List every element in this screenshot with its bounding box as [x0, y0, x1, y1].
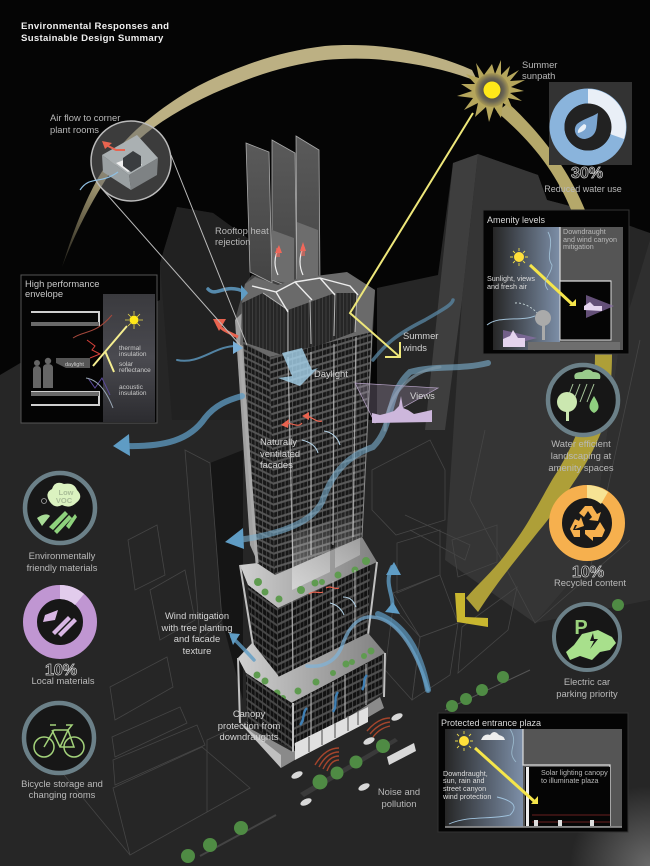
- local materials indicator: Local materials: [31, 675, 95, 686]
- red exhaust arrow: [217, 324, 238, 337]
- trees: [181, 599, 624, 863]
- panel: protected entrance plaza: Protected entrance plaza: [441, 718, 541, 728]
- icon: environmentally friendly materials: Low: [58, 488, 74, 497]
- label: environmentally friendly materials: Environmentally: [29, 550, 96, 561]
- tower top section facade: [240, 332, 372, 575]
- label: summer sunpath: Summer: [522, 59, 557, 70]
- label: naturally ventilated facades: Naturally: [260, 436, 297, 447]
- panel: high performance envelope: insulation: [119, 390, 147, 397]
- street with trees and traffic: [181, 599, 624, 863]
- label: wind mitigation: Wind mitigation: [165, 610, 229, 621]
- light rays: [93, 326, 127, 372]
- noise waves: [315, 718, 390, 771]
- lower section facade: [238, 653, 385, 760]
- label: summer sunpath: sunpath: [522, 70, 555, 81]
- daylight arrow: [56, 358, 90, 368]
- label: noise and pollution: [378, 786, 420, 809]
- panel: protected entrance plaza: [438, 713, 628, 832]
- sun icon: [457, 60, 525, 122]
- panel: high performance envelope: insulation: [119, 351, 147, 358]
- panel: high performance envelope: High performance: [25, 278, 100, 289]
- cars: [290, 712, 404, 807]
- label: views: Views: [410, 390, 435, 401]
- small red arrows and white vents: [285, 416, 322, 425]
- lower terrace with trees: [238, 633, 385, 703]
- icon: recycling: [570, 506, 605, 541]
- label: water efficient landscaping: Water efficient: [551, 438, 611, 449]
- recycled content indicator: Recycled content: [554, 577, 626, 588]
- label: environmentally friendly materials: [27, 550, 98, 573]
- label: daylight: Daylight: [314, 368, 348, 379]
- title: Environmental Responses and: [21, 21, 169, 32]
- label: canopy protection: Canopy: [233, 708, 265, 719]
- summer wind: [373, 300, 453, 360]
- spires: [246, 136, 320, 290]
- label: summer winds: [402, 330, 438, 353]
- panel: protected entrance plaza: street canyon: [443, 784, 486, 793]
- local materials indicator: 10%: [45, 662, 77, 679]
- panel: high performance envelope: acoustic: [119, 384, 144, 391]
- yellow light rays: [350, 113, 473, 357]
- label: water efficient landscaping: [548, 438, 614, 473]
- icon: bicycle: [24, 703, 94, 773]
- tower roof: [240, 272, 375, 357]
- water use indicator: Reduced water use: [544, 184, 622, 194]
- city buildings right: [372, 340, 640, 700]
- panel: amenity levels: and wind canyon: [563, 235, 617, 244]
- water use indicator: 30%: [571, 165, 603, 182]
- label: wind mitigation: with tree planting: [161, 622, 232, 633]
- middle terrace with trees: [240, 505, 377, 608]
- label: naturally ventilated facades: ventilated: [260, 448, 300, 459]
- icon: tree: [535, 310, 551, 326]
- icon: water efficient landscaping: [548, 365, 618, 435]
- through-tower stream: [238, 363, 488, 540]
- label: water efficient landscaping: amenity spaces: [548, 462, 614, 473]
- rising wind arrow: [389, 567, 392, 610]
- sun path arc: [62, 45, 612, 627]
- panel: high performance envelope: envelope: [25, 288, 63, 299]
- label: electric car parking: Electric car: [564, 676, 610, 687]
- panel: protected entrance plaza: to illuminate plaza: [541, 776, 599, 785]
- label: canopy protection: downdraughts: [220, 731, 279, 742]
- label: water efficient landscaping: landscaping at: [551, 450, 612, 461]
- icon: electric car parking: [554, 604, 620, 670]
- label: rooftop heat rejection: Rooftop heat: [215, 225, 269, 236]
- panel: protected entrance plaza: wind protection: [442, 792, 491, 801]
- icon: environmentally friendly materials: VOC: [56, 496, 73, 505]
- icon: water drop: [575, 113, 598, 139]
- views skyline: [355, 383, 438, 423]
- label: wind mitigation: [161, 610, 232, 656]
- icon: plaza sun: [459, 736, 469, 746]
- panel: amenity levels: Amenity levels: [487, 215, 546, 225]
- skylines: [503, 330, 537, 347]
- panel: protected entrance plaza: Downdraught,: [443, 769, 488, 778]
- label: canopy protection: protection from: [218, 720, 280, 731]
- middle section facade: [240, 562, 377, 677]
- left canopy wind: [232, 637, 254, 660]
- panel: high performance envelope: reflectance: [119, 367, 151, 374]
- water use indicator: [544, 82, 632, 194]
- icon: electric car parking: P: [574, 617, 588, 639]
- local materials indicator: [30, 585, 95, 686]
- label: noise and pollution: pollution: [382, 798, 416, 809]
- panel: high performance envelope: [21, 275, 157, 423]
- wind curve: [545, 232, 552, 290]
- label: bicycle storage: changing rooms: [29, 789, 96, 800]
- callout: air flow to corner plant rooms: Air flow to corner: [50, 112, 120, 123]
- label: summer winds: winds: [402, 342, 427, 353]
- label: naturally ventilated facades: [260, 436, 300, 470]
- panel: high performance envelope: thermal: [119, 345, 141, 352]
- mid stream: [307, 617, 428, 690]
- icon: cloud: [481, 732, 505, 740]
- panel: high performance envelope: solar: [119, 361, 134, 368]
- title: [21, 21, 169, 44]
- large left wind: [125, 396, 242, 446]
- rear tower glass body: [235, 273, 375, 580]
- label: noise and pollution: Noise and: [378, 786, 420, 797]
- daylight arrow: [278, 348, 318, 386]
- icon: environmentally friendly materials: [25, 473, 95, 543]
- panel: amenity levels: Sunlight, views: [487, 274, 535, 283]
- wind arrows: [113, 285, 488, 725]
- label: environmentally friendly materials: friendly materials: [27, 562, 98, 573]
- label: wind mitigation: texture: [183, 645, 211, 656]
- rooftop wind: [208, 289, 245, 292]
- blue in lower facade: [300, 675, 367, 725]
- label: summer winds: Summer: [403, 330, 438, 341]
- panel: amenity levels: Downdraught: [563, 227, 606, 236]
- label: rooftop heat rejection: [215, 225, 269, 247]
- label: canopy protection: [218, 708, 280, 742]
- label: electric car parking: parking priority: [556, 688, 618, 699]
- stream end: [385, 367, 440, 430]
- panel: amenity levels: [483, 210, 629, 354]
- label: rooftop heat rejection: rejection: [215, 236, 250, 247]
- city buildings lower left: [60, 450, 250, 855]
- label: naturally ventilated facades: facades: [260, 459, 293, 470]
- panel: protected entrance plaza: Solar lighting canopy: [541, 768, 608, 777]
- bus: [387, 743, 416, 765]
- icon: small sun: [130, 316, 138, 324]
- label: bicycle storage: [21, 778, 103, 800]
- label: wind mitigation: and facade: [174, 633, 220, 644]
- icon: people: [33, 358, 53, 388]
- label: electric car parking: [556, 676, 618, 699]
- left intake wind: [177, 346, 238, 361]
- recycled content indicator: 10%: [572, 564, 604, 581]
- callout: air flow to corner plant rooms: [50, 112, 247, 345]
- panel: amenity levels: and fresh air: [487, 282, 528, 291]
- label: bicycle storage: Bicycle storage and: [21, 778, 103, 789]
- panel: protected entrance plaza: sun, rain and: [443, 776, 485, 785]
- recycled content indicator: [554, 485, 626, 588]
- panel: high performance envelope: daylight: [65, 362, 84, 368]
- label: summer sunpath: [522, 59, 557, 81]
- icon: amenity sun: [514, 252, 524, 262]
- callout: air flow to corner plant rooms: plant rooms: [50, 124, 99, 135]
- title: Sustainable Design Summary: [21, 33, 164, 44]
- entrance canopy and base: [240, 697, 384, 768]
- panel: amenity levels: mitigation: [563, 242, 594, 251]
